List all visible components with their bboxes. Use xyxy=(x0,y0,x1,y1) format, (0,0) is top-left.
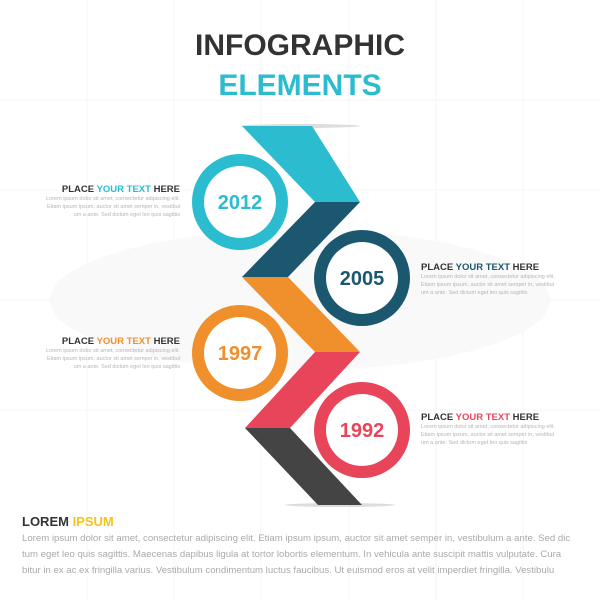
text block 1997 xyxy=(46,336,180,370)
text block 2012: Etiam ipsum ipsum, auctor sit amet semper in, vestibul xyxy=(47,204,180,210)
text block 1997: um a ante. Sed dictum eget leo quis sagittis xyxy=(74,364,180,370)
circle 2012: 2012 xyxy=(218,192,262,214)
text block 2005: Lorem ipsum dolor sit amet, consectetur adipiscing elit. xyxy=(421,274,555,280)
text block 2005: um a ante. Sed dictum eget leo quis sagittis xyxy=(421,290,527,296)
text block 1997: Lorem ipsum dolor sit amet, consectetur adipiscing elit. xyxy=(46,348,180,354)
bottom body text: bitur in ex ac ex fringilla varius. Vestibulum condimentum luctus faucibus. Ut euismod eros at velit imperdiet fringilla. Vestibulu xyxy=(22,565,554,576)
bottom body text: Lorem ipsum dolor sit amet, consectetur adipiscing elit. Etiam ipsum ipsum, auctor sit amet semper in, vestibulum a ante. Sed dic xyxy=(22,533,570,544)
text block 1992: PLACE YOUR TEXT HERE xyxy=(421,412,539,423)
text block 2012: um a ante. Sed dictum eget leo quis sagittis xyxy=(74,212,180,218)
text block 1997: Etiam ipsum ipsum, auctor sit amet semper in, vestibul xyxy=(47,356,180,362)
text block 2005: PLACE YOUR TEXT HERE xyxy=(421,262,539,273)
text block 1992 xyxy=(421,412,555,446)
circle 2005: 2005 xyxy=(340,268,384,290)
text block 2005 xyxy=(421,262,555,296)
circle 2012 xyxy=(192,154,288,250)
circle 1992 xyxy=(314,382,410,478)
text block 1992: Etiam ipsum ipsum, auctor sit amet semper in, vestibul xyxy=(421,432,554,438)
bottom heading: LOREM IPSUM xyxy=(22,514,114,529)
text block 2012: Lorem ipsum dolor sit amet, consectetur adipiscing elit. xyxy=(46,196,180,202)
bottom body text xyxy=(22,533,570,576)
text block 1992: um a ante. Sed dictum eget leo quis sagittis xyxy=(421,440,527,446)
circle 1997: 1997 xyxy=(218,343,262,365)
circle 1992: 1992 xyxy=(340,420,384,442)
text block 2005: Etiam ipsum ipsum, auctor sit amet semper in, vestibul xyxy=(421,282,554,288)
text block 2012 xyxy=(46,184,180,218)
title: ELEMENTS xyxy=(218,69,382,102)
circle 1997 xyxy=(192,305,288,401)
bottom body text: tum eget leo quis sagittis. Maecenas dapibus ligula at tortor lobortis elementum. In vehicula ante suscipit mattis vulputate. Cura xyxy=(22,549,561,560)
text block 1997: PLACE YOUR TEXT HERE xyxy=(62,336,180,347)
title: INFOGRAPHIC xyxy=(195,29,405,62)
circle 2005 xyxy=(314,230,410,326)
text block 2012: PLACE YOUR TEXT HERE xyxy=(62,184,180,195)
text block 1992: Lorem ipsum dolor sit amet, consectetur adipiscing elit. xyxy=(421,424,555,430)
title xyxy=(195,29,405,102)
